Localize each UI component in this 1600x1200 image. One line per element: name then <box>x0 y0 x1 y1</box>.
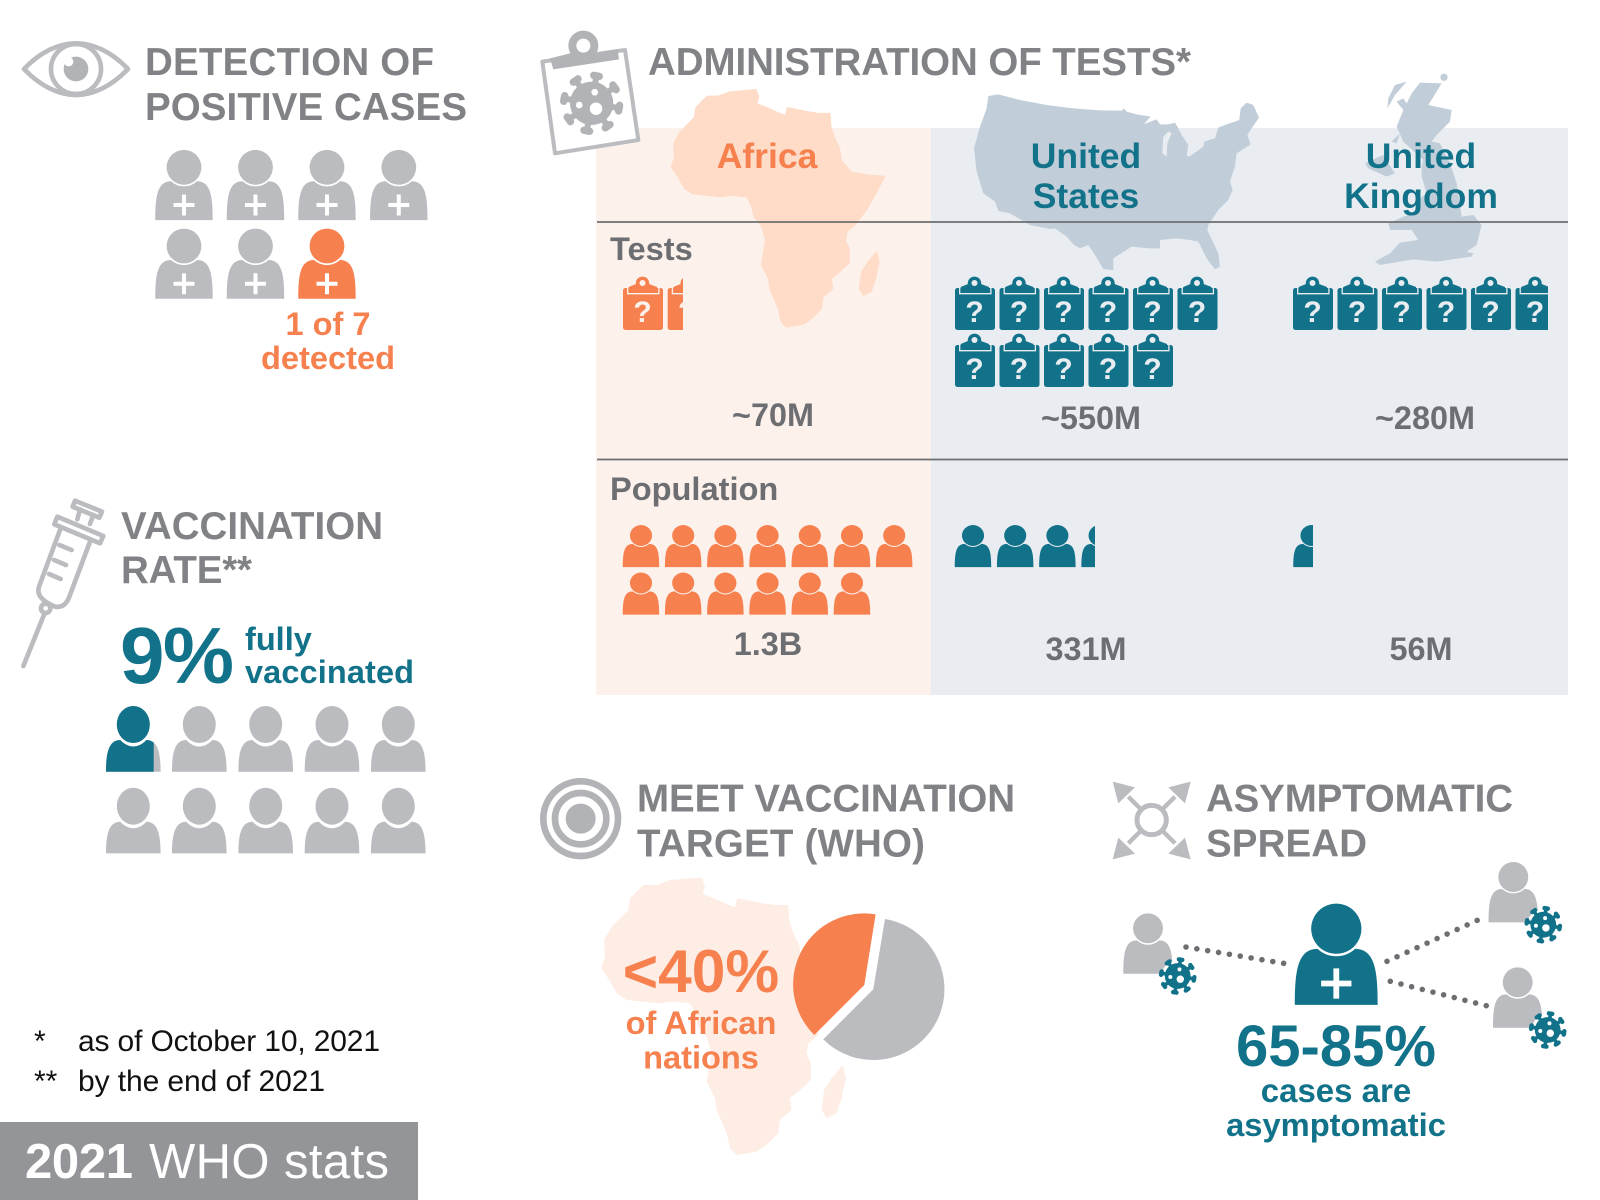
heading: meet vaccination target <box>637 778 1015 866</box>
pictogram: us tests: ? <box>1143 353 1162 386</box>
pictogram: us tests: ? <box>1054 296 1073 329</box>
pictogram: uk tests: ? <box>1348 296 1366 329</box>
footnotes: ** <box>34 1065 58 1098</box>
value: africa population: 1.3B <box>734 626 802 662</box>
heading: meet vaccination target: TARGET (WHO) <box>637 823 925 866</box>
title bar: WHO stats <box>149 1135 389 1189</box>
pictogram: uk tests: ? <box>1392 296 1411 329</box>
stat: under 40 percent of african nations: <40% <box>623 937 779 1005</box>
stat: 65-85 percent cases asymptomatic <box>1226 1014 1446 1143</box>
title bar <box>0 1122 418 1200</box>
heading: detection of positive cases: DETECTION OF <box>145 41 434 84</box>
callout: 1 of 7 detected: detected <box>261 339 395 376</box>
heading: vaccination rate <box>121 505 383 592</box>
title bar: 2021 <box>25 1135 133 1189</box>
map: africa <box>671 89 886 328</box>
pictogram: uk tests: ? <box>1437 296 1455 329</box>
row label: tests: Tests <box>610 230 693 267</box>
icon: infected person top right <box>1489 862 1562 944</box>
map: united kingdom <box>1365 74 1482 265</box>
pictogram: us tests: ? <box>965 296 984 329</box>
dotted transmission lines <box>1186 920 1488 1006</box>
heading: asymptomatic spread <box>1206 778 1513 866</box>
icon: syringe <box>23 501 103 666</box>
pictogram: us tests: ? <box>965 353 984 386</box>
pictogram: us tests: ? <box>1143 296 1162 329</box>
heading: asymptomatic spread: ASYMPTOMATIC <box>1206 778 1513 821</box>
pie chart: under 40 percent <box>793 913 944 1060</box>
pictogram: us tests: ? <box>1099 296 1117 329</box>
pictogram: us tests: ? <box>1188 296 1206 329</box>
heading: meet vaccination target: MEET VACCINATION <box>637 778 1015 821</box>
footnotes <box>34 1025 380 1098</box>
stat: 9 percent fully vaccinated <box>120 611 414 700</box>
pictogram: africa population <box>623 525 912 615</box>
stat: 9 percent fully vaccinated: 9% <box>120 611 234 700</box>
map: united states <box>974 94 1259 270</box>
icon: spreading arrows <box>1113 782 1191 859</box>
stat: 65-85 percent cases asymptomatic: 65-85% <box>1236 1014 1436 1079</box>
pictogram: us population <box>954 525 1095 568</box>
pictogram: ten people vaccination <box>106 706 426 853</box>
icon: target <box>543 781 618 856</box>
footnotes: as of October 10, 2021 <box>78 1025 380 1058</box>
icon: eye <box>24 43 128 95</box>
panel: africa column background <box>596 128 931 695</box>
heading: detection of positive cases: POSITIVE CASES <box>145 86 467 129</box>
column header: united kingdom: United <box>1366 136 1476 176</box>
stat: 65-85 percent cases asymptomatic: cases are <box>1261 1072 1411 1109</box>
pictogram: uk tests <box>1293 277 1556 330</box>
stat: under 40 percent of african nations <box>623 937 779 1076</box>
column header: africa: Africa <box>717 136 818 176</box>
pictogram: uk tests: ? <box>1481 296 1500 329</box>
column header: united states: United <box>1031 136 1141 176</box>
value: us tests: ~550M <box>1041 400 1141 436</box>
stat: under 40 percent of african nations: nations <box>643 1038 759 1076</box>
value: us population: 331M <box>1045 631 1127 667</box>
pictogram: africa tests <box>623 276 683 330</box>
pictogram: africa tests: ? <box>633 296 652 329</box>
callout: 1 of 7 detected: 1 of 7 <box>286 306 370 342</box>
value: uk population: 56M <box>1389 631 1453 667</box>
heading: detection of positive cases <box>145 41 467 129</box>
row label: population: Population <box>610 470 778 507</box>
stat: 9 percent fully vaccinated: fully <box>245 621 312 657</box>
column header: united kingdom <box>1344 136 1498 216</box>
callout: 1 of 7 detected <box>261 306 395 376</box>
pictogram: uk tests: ? <box>1303 296 1322 329</box>
icon: central asymptomatic person <box>1295 904 1378 1005</box>
footnotes: by the end of 2021 <box>78 1065 325 1098</box>
heading: asymptomatic spread: SPREAD <box>1206 823 1367 866</box>
value: africa tests: ~70M <box>732 397 814 433</box>
column header: united states: States <box>1033 176 1139 216</box>
pictogram: us tests: ? <box>1054 353 1073 386</box>
icon: clipboard with virus <box>542 31 638 153</box>
value: uk tests: ~280M <box>1375 400 1475 436</box>
column header: united states <box>1031 136 1141 216</box>
pictogram: seven positive cases <box>155 150 428 299</box>
pictogram: us tests: ? <box>1010 353 1028 386</box>
map: africa with pie <box>601 877 944 1155</box>
stat: 65-85 percent cases asymptomatic: asymptomatic <box>1226 1106 1446 1143</box>
pictogram: uk population <box>1293 525 1313 568</box>
stat: 9 percent fully vaccinated: vaccinated <box>245 654 414 690</box>
panel: us and uk column background <box>931 128 1568 695</box>
pictogram: africa tests: ? <box>678 296 696 329</box>
column header: united kingdom: Kingdom <box>1344 176 1498 216</box>
pictogram: uk tests: ? <box>1526 296 1544 329</box>
icon: infected person bottom right <box>1493 967 1567 1049</box>
stat: under 40 percent of african nations: of African <box>626 1004 776 1041</box>
heading: vaccination rate: RATE** <box>121 549 252 592</box>
table divider lines <box>597 222 1568 460</box>
pictogram: us tests: ? <box>1010 296 1028 329</box>
heading: vaccination rate: VACCINATION <box>121 505 383 548</box>
pictogram: us tests <box>955 277 1218 387</box>
footnotes: * <box>34 1025 46 1058</box>
icon: infected person left <box>1123 913 1197 995</box>
heading: administration of tests: ADMINISTRATION OF TESTS* <box>648 41 1191 84</box>
pictogram: us tests: ? <box>1099 353 1117 386</box>
